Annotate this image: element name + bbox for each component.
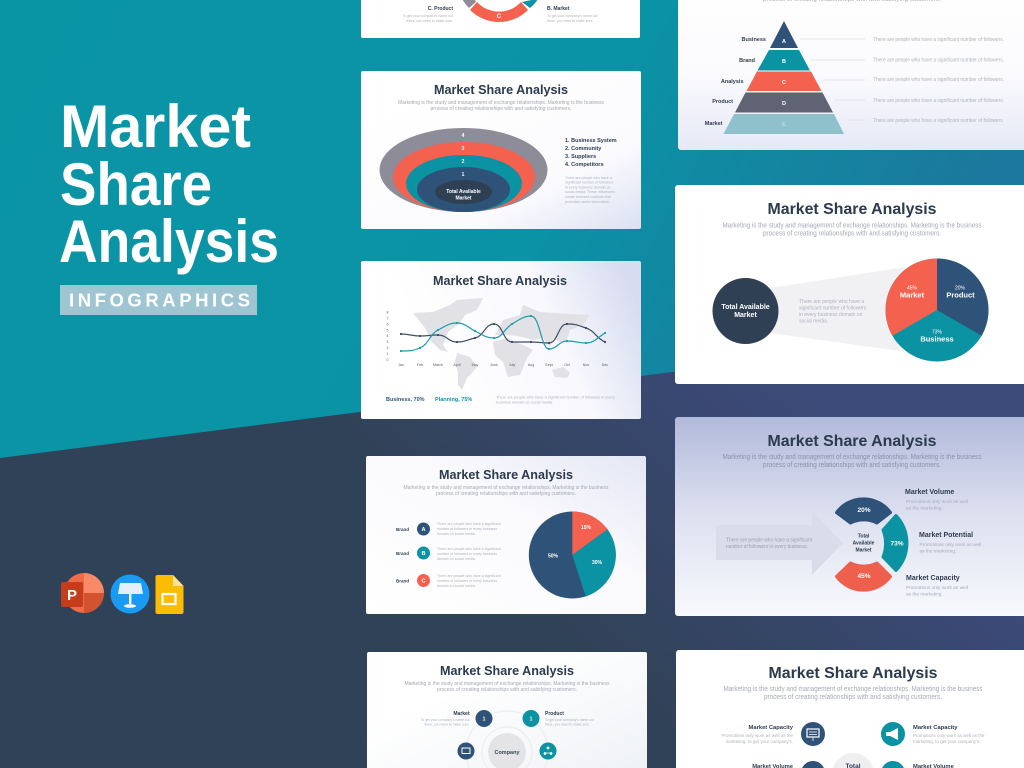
row: brand C: C	[422, 578, 426, 584]
subheading	[722, 222, 982, 238]
subheading: process of creating relationships with and satisfying customers.	[436, 491, 576, 497]
heading: Market Share Analysis	[433, 273, 567, 288]
nested ellipse chart: Total Available	[446, 189, 481, 195]
subheading: process of creating relationships with and satisfying customers.	[763, 462, 941, 469]
pyramid descriptions: There are people who have a significant number of followers.	[873, 77, 1004, 83]
pyramid labels: Market	[705, 121, 723, 127]
label: market volume: as the marketing.	[906, 506, 943, 512]
icon: hierarchy node	[540, 742, 556, 760]
heading: Market Share Analysis	[768, 201, 937, 218]
pie chart: 45%	[907, 286, 918, 292]
month labels: June	[490, 363, 498, 367]
legend	[386, 397, 472, 403]
node: market: 1	[483, 716, 486, 722]
label: market: there, you need to make sure.	[547, 19, 594, 23]
paragraph: social media.	[799, 318, 828, 324]
panel: donut slide (cropped top)	[361, 0, 640, 38]
panel: funnel pie slide	[675, 185, 1024, 384]
node: product: 1	[530, 716, 533, 722]
node: market	[421, 710, 492, 727]
pie chart: Business	[920, 334, 954, 344]
month labels: Aug	[528, 363, 534, 367]
arrow: number of followers in every business.	[726, 544, 808, 550]
pie chart: 73%	[932, 330, 943, 336]
panel: company cycle slide	[367, 652, 647, 768]
title: Share	[60, 151, 212, 218]
item: capacity left: Market Capacity	[749, 725, 794, 731]
cycle rings	[466, 711, 548, 768]
icon: PowerPoint	[61, 573, 104, 613]
label: market capacity: as the marketing.	[906, 592, 943, 598]
donut center label	[853, 534, 875, 554]
arrow: There are people who have a significant	[726, 538, 813, 544]
icon: Keynote	[110, 574, 150, 614]
panel: line chart slide	[361, 261, 641, 419]
note: business domain on social media.	[496, 400, 553, 404]
item: capacity left	[721, 725, 794, 744]
icon: megaphone	[881, 722, 905, 746]
legend: Planning, 75%	[435, 397, 472, 403]
node: product	[522, 710, 594, 727]
paragraph: There are people who have a	[799, 299, 864, 305]
y axis labels	[387, 310, 389, 362]
row: brand B: B	[422, 551, 426, 557]
label: market: B. Market	[547, 6, 570, 12]
y axis labels: 6	[387, 322, 389, 326]
pyramid descriptions: There are people who have a significant number of followers.	[873, 118, 1004, 124]
month labels: March	[433, 363, 443, 367]
pyramid descriptions: There are people who have a significant number of followers.	[873, 37, 1004, 43]
month labels: Dec	[602, 363, 608, 367]
y axis labels: 7	[387, 316, 389, 320]
pyramid chart: B	[782, 59, 786, 65]
subheading: process of creating relationships with and satisfying customers.	[763, 230, 941, 238]
pyramid chart	[724, 21, 844, 134]
label: market potential: as the marketing.	[920, 548, 956, 554]
month labels: May	[472, 363, 479, 367]
row: brand A: number of followers in every business	[437, 527, 497, 531]
label: market volume	[905, 489, 968, 512]
center: company: Company	[494, 750, 520, 756]
subheading	[404, 485, 609, 497]
label: market capacity	[906, 575, 968, 598]
series: business	[400, 323, 606, 344]
y axis labels: 3	[387, 340, 389, 344]
pyramid chart: D	[782, 101, 786, 107]
list	[565, 138, 617, 168]
pyramid descriptions: There are people who have a significant number of followers.	[873, 98, 1004, 104]
circle: total available market: Total Available	[721, 304, 770, 311]
paragraph: promotes useful information.	[565, 200, 610, 204]
paragraph: significant number of followers	[565, 180, 614, 184]
nested ellipse chart	[380, 128, 548, 212]
subheading	[724, 686, 983, 701]
connector lines	[800, 39, 865, 120]
label: product	[403, 6, 453, 23]
donut segments: 45%	[857, 573, 871, 580]
center: total	[832, 753, 874, 768]
paragraph: create branded contents that	[565, 195, 611, 199]
nested ellipse chart: 2	[462, 159, 465, 165]
row: brand A: There are people who have a significant	[437, 522, 501, 526]
panel: market metrics slide	[676, 650, 1024, 768]
label: product: To get your company's name out	[403, 14, 453, 18]
pyramid chart: A	[782, 39, 786, 45]
pie chart	[529, 511, 616, 598]
donut segments	[836, 499, 907, 590]
month labels: April	[453, 363, 461, 367]
y axis labels: 2	[387, 346, 389, 350]
legend: Business, 70%	[386, 397, 425, 403]
row: brand C: domain on social media.	[437, 584, 476, 588]
row: brand C: Brand	[396, 578, 409, 584]
y axis labels: 1	[387, 352, 389, 356]
pie chart: Product	[946, 290, 975, 300]
subheading: Marketing is the study and management of exchange relationships. Marketing is the business	[724, 686, 983, 693]
subheading: Marketing is the study and management of exchange relationships. Marketing is the business	[398, 100, 604, 106]
pie chart: Market	[900, 290, 925, 300]
paragraph: social media. These influencers	[565, 190, 615, 194]
badge: infographics	[60, 285, 257, 315]
paragraph: in every business domain on	[799, 312, 863, 318]
note	[496, 396, 615, 404]
heading: Market Share Analysis	[768, 433, 937, 450]
row: brand B: There are people who have a significant	[437, 547, 501, 551]
item: volume right	[881, 761, 955, 768]
nested ellipse chart: 4	[462, 133, 465, 139]
paragraph	[799, 299, 867, 324]
subheading: Marketing is the study and management of exchange relationships. Marketing is the business	[404, 485, 609, 491]
row: brand A: domain on social media.	[437, 532, 476, 536]
row: brand A: Brand	[396, 527, 409, 532]
row: brand C: There are people who have a significant	[437, 574, 501, 578]
list: 1. Business System	[565, 138, 617, 144]
month labels: Nov	[583, 363, 589, 367]
y axis labels: 5	[387, 328, 389, 332]
nested ellipse chart: 3	[462, 146, 465, 152]
item: capacity right: Market Capacity	[913, 725, 958, 731]
paragraph	[565, 176, 615, 204]
circle: total available market	[712, 278, 778, 344]
row: brand B: number of followers in every business	[437, 552, 497, 556]
nested ellipse chart: Market	[455, 196, 472, 202]
badge: infographics: INFOGRAPHICS	[69, 290, 250, 310]
note: There are people who have a significant number of followers in every	[496, 396, 615, 400]
paragraph: in every business domain on	[565, 186, 611, 190]
pyramid labels: Brand	[739, 58, 755, 64]
list: 2. Community	[565, 146, 602, 152]
pyramid descriptions: There are people who have a significant number of followers.	[873, 58, 1004, 64]
node: product: Product	[545, 711, 564, 717]
title: Analysis	[59, 208, 279, 275]
subheading: process of creating relationships with and satisfying customers.	[437, 687, 577, 693]
pie chart: 20%	[955, 286, 966, 292]
subheading: process of creating relationships with and satisfying customers.	[430, 106, 572, 112]
month labels	[398, 363, 608, 367]
pyramid labels: Product	[712, 99, 733, 105]
icon: PowerPoint: P	[67, 587, 77, 604]
arrow	[716, 511, 843, 575]
label: market volume: Market Volume	[905, 489, 954, 496]
month labels: Sept	[545, 363, 553, 367]
donut segments: C	[497, 13, 502, 20]
pyramid labels: Analysis	[721, 79, 744, 85]
pyramid labels: Business	[742, 37, 766, 43]
donut center label: Available	[853, 540, 875, 546]
item: capacity right	[913, 725, 985, 744]
donut segments: 73%	[890, 540, 904, 548]
paragraph: There are people who have a	[565, 176, 612, 180]
month labels: Oct	[564, 363, 570, 367]
donut segments: 20%	[857, 507, 871, 514]
row: brand B	[396, 546, 501, 561]
pyramid descriptions	[873, 37, 1004, 124]
subheading: process of creating relationships with and satisfying customers.	[764, 694, 942, 701]
pie chart: 50%	[548, 554, 559, 560]
heading: Market Share Analysis	[440, 663, 574, 678]
row: brand B: Brand	[396, 551, 409, 556]
label: market potential: Promotions only work as well	[920, 542, 981, 548]
month labels: Feb	[417, 363, 423, 367]
label: market	[547, 6, 598, 23]
subheading	[404, 681, 610, 693]
item: capacity left: marketing, to get your company's.	[726, 739, 793, 744]
background: teal upper band	[0, 0, 1024, 460]
panel: segmented donut slide	[675, 417, 1024, 616]
label: market: To get your company's name out	[547, 14, 598, 18]
y axis labels: 0	[387, 358, 389, 362]
label: market capacity: Market Capacity	[906, 575, 960, 582]
pyramid labels	[705, 37, 766, 127]
label: product: C. Product	[428, 6, 453, 12]
node: market: Market	[453, 711, 470, 717]
pie chart: 15%	[581, 525, 592, 531]
icon: presentation board	[801, 722, 825, 746]
background: dark lower band	[0, 327, 1024, 768]
item: capacity right: Promotions only work as well as the	[913, 733, 985, 738]
panel: pyramid slide	[678, 0, 1024, 150]
y axis labels: 4	[387, 334, 389, 338]
y axis labels: 8	[387, 310, 389, 314]
label: market volume: Promotions only work as well	[906, 499, 968, 505]
donut center label: Total	[858, 534, 870, 540]
item: capacity right: marketing, to get your company's.	[913, 739, 980, 744]
heading: Market Share Analysis	[439, 467, 573, 482]
item: capacity left: Promotions only work as well as the	[721, 733, 793, 738]
row: brand A	[396, 522, 501, 536]
list: 4. Competitors	[565, 162, 604, 168]
row: brand B: domain on social media.	[437, 557, 476, 561]
donut segments	[462, 0, 538, 22]
circle: total available market: Market	[734, 312, 757, 319]
row: brand A: A	[422, 527, 426, 533]
heading: Market Share Analysis	[434, 82, 568, 97]
node: product: there, you need to make sure.	[545, 722, 590, 726]
label: product: there, you need to make sure.	[406, 19, 453, 23]
month labels: July	[509, 363, 515, 367]
node: market: To get your company's name out	[421, 718, 470, 722]
nested ellipse chart: 1	[462, 172, 465, 178]
subheading: Marketing is the study and management of exchange relationships. Marketing is the business	[722, 222, 982, 230]
heading: Market Share Analysis	[768, 665, 938, 682]
list: 3. Suppliers	[565, 154, 596, 160]
pyramid chart: C	[782, 80, 786, 86]
label: market capacity: Promotions only work as well	[906, 585, 968, 591]
title: Market	[60, 93, 251, 160]
world map	[413, 298, 590, 390]
panel: pie chart slide	[366, 456, 646, 614]
icon: presentation node	[458, 742, 474, 760]
panel: nested ellipses slide	[361, 71, 641, 229]
funnel shape	[770, 267, 905, 351]
item: volume left	[752, 761, 825, 768]
subheading: Marketing is the study and management of exchange relationships. Marketing is the business	[404, 681, 610, 687]
node: product: To get your company's name out	[545, 718, 594, 722]
donut center label: Market	[855, 548, 872, 554]
paragraph: significant number of followers	[799, 306, 867, 312]
subheading	[398, 100, 604, 112]
series: planning	[400, 315, 606, 352]
pie chart	[886, 258, 988, 362]
subheading: Marketing is the study and management of exchange relationships. Marketing is the business	[722, 454, 982, 461]
label: market potential: Market Potential	[919, 532, 973, 539]
row: brand C	[396, 574, 501, 588]
month labels: Jan	[398, 363, 404, 367]
subheading	[722, 454, 982, 469]
center: company	[488, 733, 526, 768]
row: brand C: number of followers in every business	[437, 579, 497, 583]
icon: Google Slides	[156, 575, 184, 614]
label: market potential	[919, 532, 981, 554]
pyramid chart: E	[782, 122, 786, 128]
pie chart: 30%	[592, 560, 603, 566]
node: market: there, you need to make sure.	[424, 722, 470, 726]
title	[59, 93, 279, 275]
